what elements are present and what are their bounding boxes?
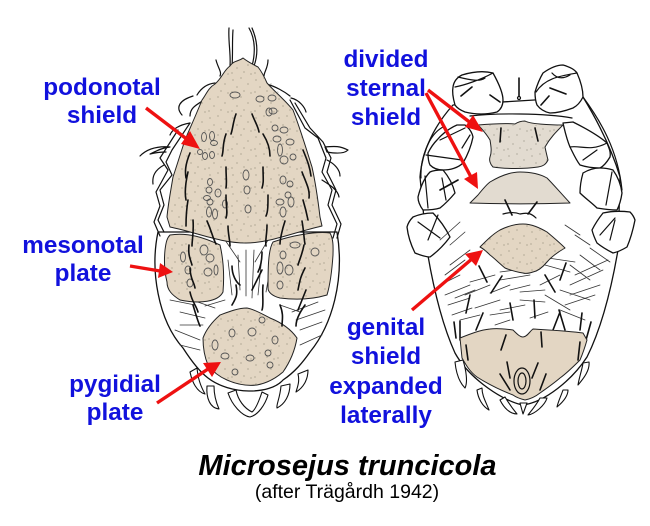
mesonotal plate right bbox=[268, 233, 333, 299]
shield stipple bbox=[165, 58, 330, 385]
arrow: podonotal bbox=[146, 108, 200, 149]
label: pygidial plate: pygidial bbox=[69, 371, 161, 398]
label: mesonotal plate: plate bbox=[55, 260, 111, 287]
label: divided sternal shield: sternal bbox=[346, 75, 426, 102]
posterior legs bbox=[455, 360, 466, 388]
dorsal body and legs bbox=[140, 28, 348, 417]
label: pygidial plate: plate bbox=[87, 399, 143, 426]
arrow: pygidial bbox=[157, 362, 221, 403]
illustration: ventral view of mite bbox=[407, 65, 635, 415]
ventral body and coxae bbox=[407, 65, 635, 415]
title: Microsejus truncicola bbox=[198, 450, 497, 482]
arrows: sternal bbox=[426, 90, 483, 189]
posterior plate bbox=[460, 329, 587, 400]
sternal shield lower bbox=[470, 172, 570, 204]
shield texture bbox=[180, 92, 319, 375]
label: podonotal shield: podonotal bbox=[43, 74, 161, 101]
label: genital shield expanded laterally: genital bbox=[347, 314, 425, 341]
label: genital shield expanded laterally: shield bbox=[351, 343, 421, 370]
label: mesonotal plate: mesonotal bbox=[22, 232, 144, 259]
setae bbox=[185, 114, 311, 326]
label: genital shield expanded laterally: laterally bbox=[340, 402, 432, 429]
posterior legs bbox=[190, 368, 205, 394]
anterior setae bbox=[216, 28, 268, 76]
label: divided sternal shield: divided bbox=[343, 46, 429, 73]
arrow: mesonotal bbox=[130, 263, 173, 278]
attribution: (after Trägårdh 1942) bbox=[255, 481, 439, 503]
genital shield bbox=[480, 224, 565, 273]
illustration: dorsal view of mite bbox=[140, 28, 348, 417]
ventral striations bbox=[440, 222, 610, 325]
sternal shield upper bbox=[478, 121, 563, 168]
ventral plate stipple bbox=[478, 125, 565, 273]
label: podonotal shield: shield bbox=[67, 102, 137, 129]
label: genital shield expanded laterally: expanded bbox=[329, 373, 443, 400]
mesonotal plate left bbox=[164, 234, 224, 302]
label: divided sternal shield: shield bbox=[351, 104, 421, 131]
arrow: genital bbox=[412, 250, 483, 310]
pygidial plate bbox=[203, 308, 297, 385]
ventral plate details bbox=[466, 128, 580, 394]
podonotal shield bbox=[167, 58, 322, 243]
